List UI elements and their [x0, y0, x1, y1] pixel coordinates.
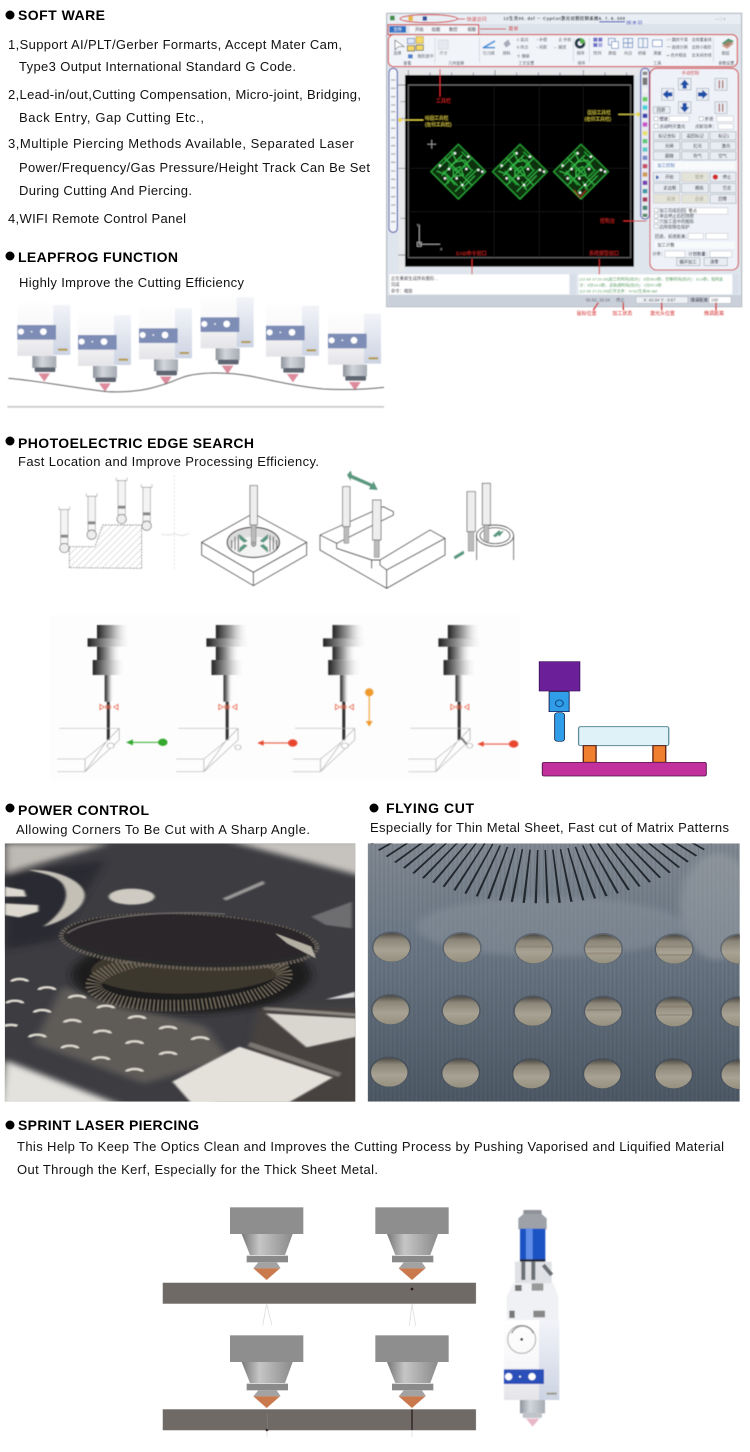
panel: software screenshot — [387, 13, 742, 317]
lower sheet — [163, 1409, 476, 1430]
ribbon toolbar: 工具 — [653, 59, 661, 65]
control buttons: 回退、前进距离： — [655, 233, 690, 240]
bullet: edge search — [6, 436, 14, 446]
ribbon toolbar: 十 微联 — [517, 52, 530, 58]
laser head 1 — [17, 299, 70, 382]
text block: software features: During Cutting And Piercing. — [19, 183, 192, 198]
status bar: X: 42.04 Y: -3.67 — [643, 298, 676, 303]
bullet: sprint laser piercing — [6, 1120, 14, 1130]
diagram: leapfrog laser heads — [7, 292, 384, 408]
ribbon toolbar: 图形居中 — [418, 52, 434, 58]
icon: pcb pattern 3 — [554, 144, 608, 199]
text: leapfrog description: Highly Improve the Cutting Efficiency — [19, 275, 244, 290]
control buttons: 停止 — [723, 174, 732, 181]
ribbon toolbar: 桥接 — [638, 49, 646, 55]
text: piercing description: Out Through the Kerf, Especially for the Thick Sheet Metal. — [17, 1162, 378, 1177]
ribbon toolbar: 几何变换 — [448, 59, 464, 65]
ribbon toolbar — [388, 35, 737, 67]
icon: direction arrows: 回原 — [657, 108, 666, 114]
title bar: 12生肖00. dxf － CypCut激光切割控制系统6. 7. 6. 300 — [503, 15, 626, 22]
text: power control description: Allowing Corners To Be Cut with A Sharp Angle. — [16, 822, 310, 837]
ribbon toolbar: ▫ 补偿 — [537, 36, 547, 42]
small holes — [5, 979, 208, 1072]
photo: cut metal disc — [0, 840, 364, 1107]
command and alarm windows: 正在重新生成所有图形... — [391, 275, 438, 282]
heading: sprint laser piercing: SPRINT LASER PIERCING — [18, 1117, 199, 1133]
annotation: status labels: 激光头位置 — [650, 310, 675, 317]
control buttons: 步进 — [705, 115, 714, 122]
left toolbar — [389, 68, 397, 232]
control buttons: 吹气 — [693, 152, 703, 159]
text: piercing description: This Help To Keep The Optics Clean and Improves the Cutting Process by Pushing Vaporised and Liquified Material — [17, 1139, 724, 1154]
control buttons: 零点 — [688, 209, 698, 215]
status bar: 停止 — [616, 297, 625, 304]
diagram: stepped profile — [59, 475, 189, 570]
annotation: layer toolbar — [585, 109, 640, 123]
title bar — [387, 14, 741, 28]
control panel — [650, 68, 738, 270]
heading: power control: POWER CONTROL — [18, 802, 149, 818]
control buttons: 模拟 — [695, 185, 704, 192]
ribbon toolbar: ▱ 圆转平滑 — [667, 36, 688, 42]
hole rows — [370, 931, 750, 1089]
control buttons: 启用软限位保护 — [659, 223, 690, 230]
control buttons: 单击停止后回到原 — [659, 213, 695, 220]
panel: power control — [0, 802, 364, 1107]
annotation: status labels: 微调距离 — [704, 310, 724, 317]
command and alarm windows — [389, 274, 739, 294]
disc — [58, 907, 320, 1013]
work surface curve — [8, 373, 384, 392]
control buttons: 计划数量： — [688, 251, 710, 258]
drawing canvas — [405, 75, 634, 267]
text block: software features: 2,Lead-in/out,Cutting Compensation, Micro-joint, Bridging, — [8, 87, 361, 102]
menu tabs: 视图 — [467, 26, 476, 33]
status bar: 50.62, 20.04 — [586, 298, 611, 303]
annotation: status labels: 加工状态 — [612, 310, 632, 317]
control buttons: 光闸 — [665, 142, 674, 149]
control buttons: 只加工选中的图形 — [659, 218, 695, 225]
control buttons: 空走 — [723, 185, 732, 192]
bullet: soft ware — [6, 10, 14, 20]
control buttons: 加工控制 — [657, 162, 675, 169]
baseline — [7, 406, 384, 408]
heading: photoelectric edge search: PHOTOELECTRIC EDGE SEARCH — [18, 435, 254, 451]
heading: flying cut: FLYING CUT — [386, 800, 474, 816]
annotation: window labels — [456, 217, 647, 276]
control buttons: 后退 — [695, 195, 704, 202]
control buttons: 激光 — [722, 142, 731, 149]
ribbon toolbar: 图层 — [722, 49, 730, 55]
ribbon toolbar: C 起点 — [517, 36, 529, 42]
annotation: drawing toolbar — [398, 114, 452, 128]
ribbon toolbar: 去除重复线 — [692, 36, 712, 42]
control buttons: 循环加工 — [679, 258, 697, 265]
annotation: drawing toolbar: 绘图工具栏 — [425, 114, 449, 121]
command and alarm windows: 命令：缩放 — [391, 287, 413, 294]
upper sheet — [163, 1283, 476, 1304]
ribbon toolbar: 排序 — [577, 49, 585, 55]
ribbon toolbar: 共边 — [624, 49, 632, 55]
control buttons: 红光 — [693, 142, 703, 149]
control buttons: 开始 — [665, 174, 674, 181]
panel: software description — [6, 7, 370, 226]
annotation: layer toolbar: 图层工具栏 — [587, 109, 611, 116]
ribbon toolbar: 引刀线 — [483, 49, 495, 55]
title bar: ─ □ × — [714, 16, 726, 21]
menu tabs: 开始 — [415, 26, 424, 33]
text block: software features — [8, 37, 370, 226]
control buttons — [652, 115, 736, 266]
status bar: 微调距离 — [691, 297, 709, 304]
command and alarm windows: (12-10 17:21:33)加工的时间(估计)：0分26.0秒，空移时间(估计)：11.0秒，短时走 — [579, 275, 723, 281]
control buttons: 跟随 — [665, 152, 674, 159]
nozzle lower left — [230, 1335, 303, 1408]
panel: flying cut — [368, 804, 740, 1102]
control buttons: 走边框 — [663, 185, 677, 192]
heading: soft ware: SOFT WARE — [18, 7, 105, 23]
tool step 2 — [176, 625, 297, 772]
ribbon toolbar: 查看 — [403, 59, 411, 65]
command and alarm windows: (12-10 17:21:29)打开文件：H:\12生肖00.dxf — [579, 288, 658, 294]
panel: photoelectric edge search — [6, 435, 706, 780]
ribbon toolbar: 测量 — [653, 49, 661, 55]
tool step 1 — [57, 625, 168, 772]
ribbon toolbar: ▫ 间距 — [537, 44, 547, 50]
nozzle upper left — [230, 1207, 303, 1280]
icon: direction arrows — [653, 78, 727, 114]
tool step 3 — [293, 625, 373, 772]
panel: sprint laser piercing — [6, 1117, 724, 1437]
piercing marks — [263, 1288, 416, 1437]
control buttons: 点射功率： — [695, 123, 717, 130]
menu tabs — [387, 24, 740, 35]
ribbon toolbar: ↔ 顺逆 — [553, 44, 566, 50]
annotation: layer toolbar: (右侧工具栏) — [585, 116, 611, 123]
annotation: status labels — [577, 303, 724, 317]
control buttons: 慢速 — [659, 115, 669, 122]
control buttons: 加工计数 — [657, 242, 675, 249]
photo: perforated metal sheet — [368, 843, 740, 1102]
ribbon toolbar: 企 外轮 — [558, 36, 571, 42]
ribbon toolbar: 排料 — [503, 49, 511, 55]
menu tabs: 绘图 — [432, 26, 440, 33]
bullet: flying cut — [370, 804, 378, 812]
nozzle upper right — [375, 1207, 449, 1280]
laser head 6 — [328, 308, 381, 390]
control buttons: 前进 — [667, 195, 676, 202]
text block: software features: 3,Multiple Piercing Methods Available, Separated Laser — [8, 136, 355, 151]
illustration: laser cutting head — [504, 1210, 559, 1427]
diagram: bored hole block — [202, 486, 307, 586]
ribbon toolbar: •• 合并相连 — [667, 52, 687, 58]
laser head 2 — [78, 309, 131, 392]
diagram: piercing stages — [163, 1207, 476, 1437]
nozzle lower right — [375, 1335, 449, 1408]
diagram: probe edge measurement line art — [59, 471, 514, 588]
annotation: window labels: 控制台 — [600, 217, 615, 224]
ribbon toolbar: ━ 曲线分割 — [667, 44, 688, 50]
ribbon toolbar: 阵列 — [593, 49, 601, 55]
command and alarm windows: 计：0分14.0秒，总轨迹时间(估计)：1分37.0秒 — [579, 282, 662, 288]
control buttons: 空气 — [718, 152, 728, 158]
control buttons: 标记1 — [718, 132, 730, 139]
drawing canvas: Y — [417, 224, 420, 228]
tool step 4 — [408, 625, 518, 772]
ribbon toolbar: 群组 — [608, 49, 616, 55]
laser head 3 — [139, 303, 192, 385]
laser head 5 — [266, 300, 319, 382]
icon: pcb pattern 1 — [431, 144, 486, 199]
ribbon toolbar: 去未闭合线 — [692, 52, 712, 58]
text: piercing description — [17, 1139, 724, 1177]
control buttons: 加工完成后回原点 — [659, 207, 695, 214]
ribbon toolbar: 尺寸 — [439, 49, 447, 55]
ribbon toolbar: 排序 — [577, 59, 585, 65]
diagram: cylinder bore — [454, 483, 514, 560]
control buttons: 点动时开激光 — [659, 123, 686, 130]
ribbon toolbar: S 终点 — [517, 44, 528, 50]
annotation: status labels: 鼠标位置 — [577, 310, 597, 317]
control buttons: 标记坐标 — [658, 132, 676, 139]
annotation: drawing toolbar: (左侧工具栏) — [425, 121, 452, 128]
rulers — [398, 68, 640, 272]
annotation: window labels: 系统报警窗口 — [589, 250, 619, 257]
cutouts — [5, 870, 357, 1103]
text: flying cut description: Especially for Thin Metal Sheet, Fast cut of Matrix Patterns — [370, 820, 730, 835]
ribbon toolbar: 选择 — [393, 49, 401, 55]
text block: software features: 1,Support AI/PLT/Gerber Formarts, Accept Mater Cam, — [8, 37, 342, 52]
ribbon toolbar: 工艺设置 — [518, 59, 534, 65]
title bar: 版本号 — [626, 20, 643, 28]
panel: leapfrog function — [6, 249, 384, 408]
control buttons: 暂停 — [695, 174, 704, 181]
text block: software features: Power/Frequency/Gas Pressure/Height Track Can Be Set — [19, 160, 370, 175]
control buttons: 返回标记 — [687, 132, 705, 139]
control buttons: 回零 — [718, 196, 728, 202]
text: edge search description: Fast Location and Improve Processing Efficiency. — [18, 454, 319, 469]
ribbon toolbar: 参数设置 — [718, 59, 734, 65]
menu tabs: 文件 — [393, 26, 403, 33]
laser head 4 — [201, 292, 254, 374]
diagram: stepped slot block — [320, 471, 445, 588]
annotation: toolbar: 工具栏 — [436, 98, 451, 105]
icon: pcb pattern 2 — [493, 144, 547, 199]
menu tabs: 菜单 — [508, 26, 518, 33]
annotation: window labels: CAD命令窗口 — [456, 250, 486, 257]
title bar: 快速访问 — [467, 16, 487, 23]
text block: software features: Back Entry, Gap Cutting Etc., — [19, 110, 204, 125]
status bar: 100 — [711, 298, 719, 303]
status bar — [388, 295, 741, 306]
radial slits — [370, 843, 712, 904]
diagram: probe tool sequence — [50, 615, 706, 780]
text block: software features: 4,WIFI Remote Control Panel — [8, 211, 186, 226]
annotation: toolbar — [436, 69, 451, 105]
command and alarm windows: 完成 — [391, 281, 400, 288]
ribbon toolbar: 去除小图形 — [692, 44, 712, 50]
control buttons: 计件： — [652, 251, 665, 258]
control panel: 手动控制 — [682, 69, 700, 76]
window frame — [387, 13, 742, 307]
text block: software features: Type3 Output International Standard G Code. — [19, 59, 296, 74]
heading: leapfrog function: LEAPFROG FUNCTION — [18, 249, 178, 265]
menu tabs: 数控 — [449, 26, 458, 33]
layer toolbar — [641, 68, 649, 219]
bullet: power control — [6, 804, 14, 812]
bullet: leapfrog — [6, 252, 14, 260]
control buttons: 清零 — [710, 258, 719, 265]
color diagram: probe over workpiece — [539, 662, 706, 776]
drawing canvas: X — [440, 248, 443, 252]
